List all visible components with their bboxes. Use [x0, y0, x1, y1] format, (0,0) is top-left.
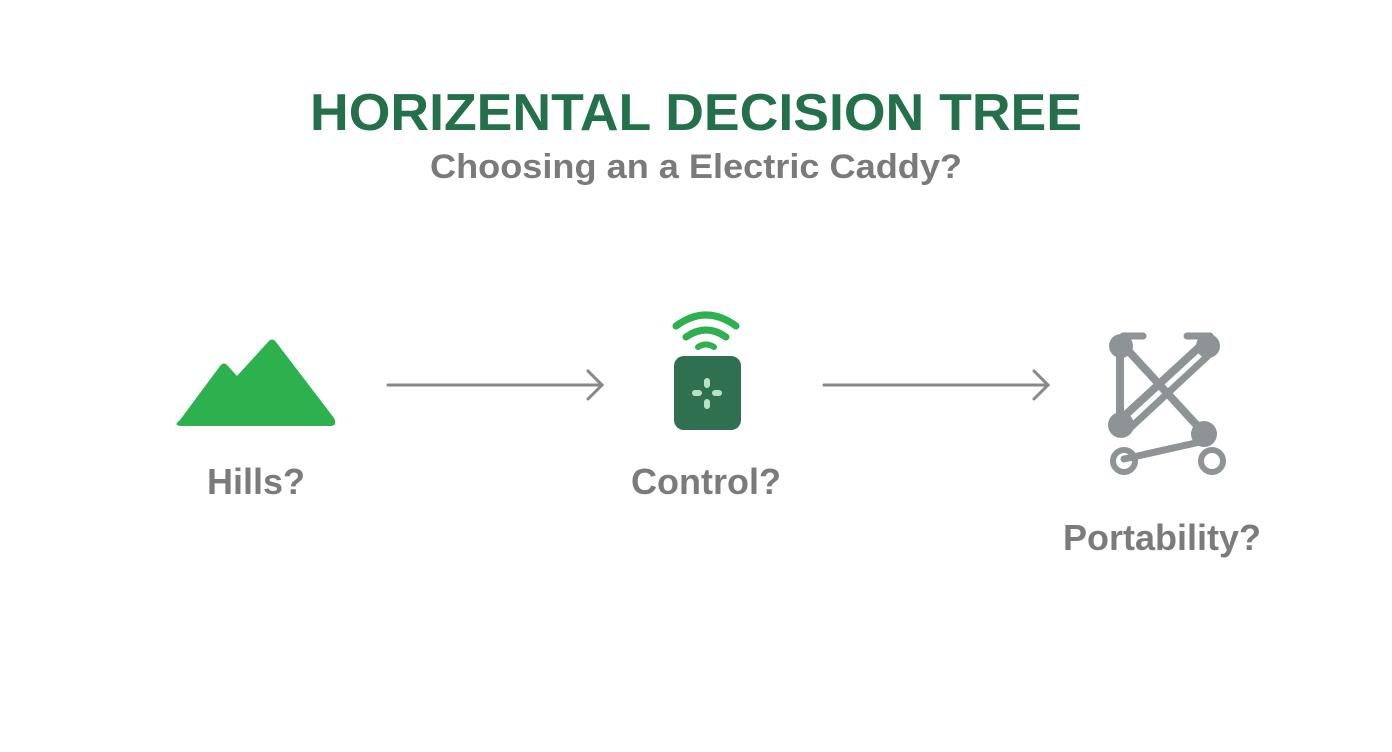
icon: remote control: [674, 315, 741, 430]
arrow 2: [824, 371, 1048, 399]
label: Hills?: Hills?: [207, 461, 305, 502]
label: Portability?: Portability?: [1063, 517, 1261, 558]
label: Control?: Control?: [631, 461, 781, 502]
title: HORIZENTAL DECISION TREE: [310, 84, 1082, 142]
icon: mountain: [176, 340, 335, 426]
subtitle: Choosing an a Electric Caddy?: [430, 148, 962, 186]
arrow 1: [388, 371, 602, 399]
icon: portability / folding caddy: [1108, 334, 1223, 472]
